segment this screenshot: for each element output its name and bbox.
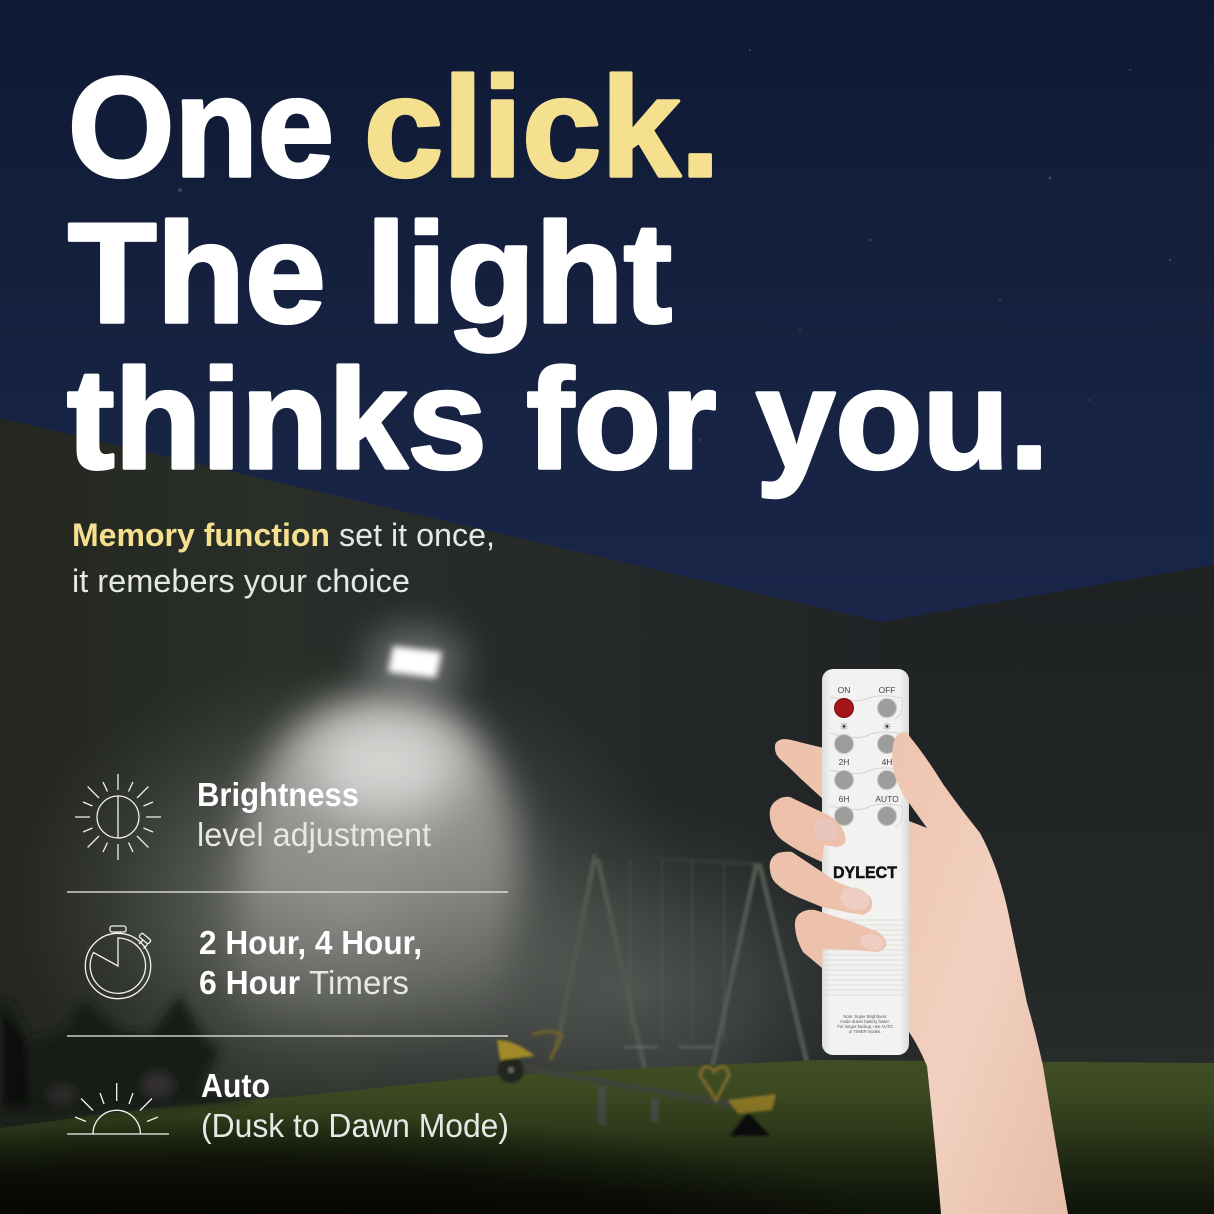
hand: ring finger (770, 852, 873, 915)
remote fine print: mode drains battery faster. (840, 1019, 890, 1024)
text: timers: 2 Hour, 4 Hour, (199, 924, 422, 961)
text: brightness: level adjustment (197, 816, 431, 853)
remote fine print: For longer backup, use AUTO (837, 1024, 893, 1029)
headline: click. (364, 48, 720, 207)
icon: dusk to dawn sunrise (67, 1083, 169, 1134)
remote fine print (837, 1014, 893, 1034)
wall floodlight (388, 646, 442, 678)
remote buttons (834, 698, 896, 826)
headline: One (68, 48, 334, 207)
swing set (557, 856, 810, 1079)
remote button labels: 4H (882, 757, 892, 767)
remote control (822, 669, 909, 1055)
headline: The light (68, 194, 672, 353)
hand: middle finger (770, 797, 846, 862)
subheading: memory function: set it once, (339, 517, 495, 553)
remote button labels: AUTO (875, 794, 899, 804)
remote button curves (830, 696, 902, 827)
remote button labels: ON (838, 685, 850, 695)
remote brand logo: DYLECT (833, 863, 898, 882)
background: grass (0, 1060, 1214, 1214)
headline: thinks for you. (67, 340, 1049, 499)
text: auto mode: (Dusk to Dawn Mode) (201, 1107, 509, 1144)
background: bushes (0, 995, 255, 1118)
icon: stopwatch timer (85, 926, 151, 999)
subheading: memory function: it remebers your choice (72, 563, 410, 599)
lower vignette (0, 1090, 1214, 1214)
remote fine print: or TIMER modes. (849, 1029, 881, 1034)
remote fine print: Note: Super Brightness (843, 1014, 887, 1019)
remote button labels: 2H (839, 757, 849, 767)
background: wall light glow (10, 626, 920, 1180)
background: night sky (0, 0, 1214, 700)
text: timers: 6 Hour (199, 964, 300, 1001)
text: timers (199, 924, 422, 1001)
text: brightness (197, 776, 431, 853)
remote button labels: 6H (839, 794, 849, 804)
text: brightness: Brightness (197, 776, 359, 813)
text: timers: Timers (309, 964, 409, 1001)
icon: brightness sun (75, 774, 161, 860)
remote button labels: ☀ (883, 722, 892, 733)
subheading: memory function (72, 517, 495, 599)
remote button labels (838, 685, 899, 804)
remote button labels: ☀ (840, 722, 849, 733)
remote grip ridges (823, 920, 908, 995)
headline (67, 48, 1049, 499)
seesaw (497, 1032, 776, 1136)
background: walls (0, 418, 1214, 1214)
text: auto mode (201, 1067, 509, 1144)
hand: palm, thumb and wrist (892, 732, 1068, 1214)
remote button labels: OFF (878, 685, 896, 695)
hand: little finger (795, 910, 886, 968)
subheading: memory function: Memory function (72, 517, 330, 553)
text: auto mode: Auto (201, 1067, 270, 1104)
hand: index finger behind remote (775, 739, 824, 800)
